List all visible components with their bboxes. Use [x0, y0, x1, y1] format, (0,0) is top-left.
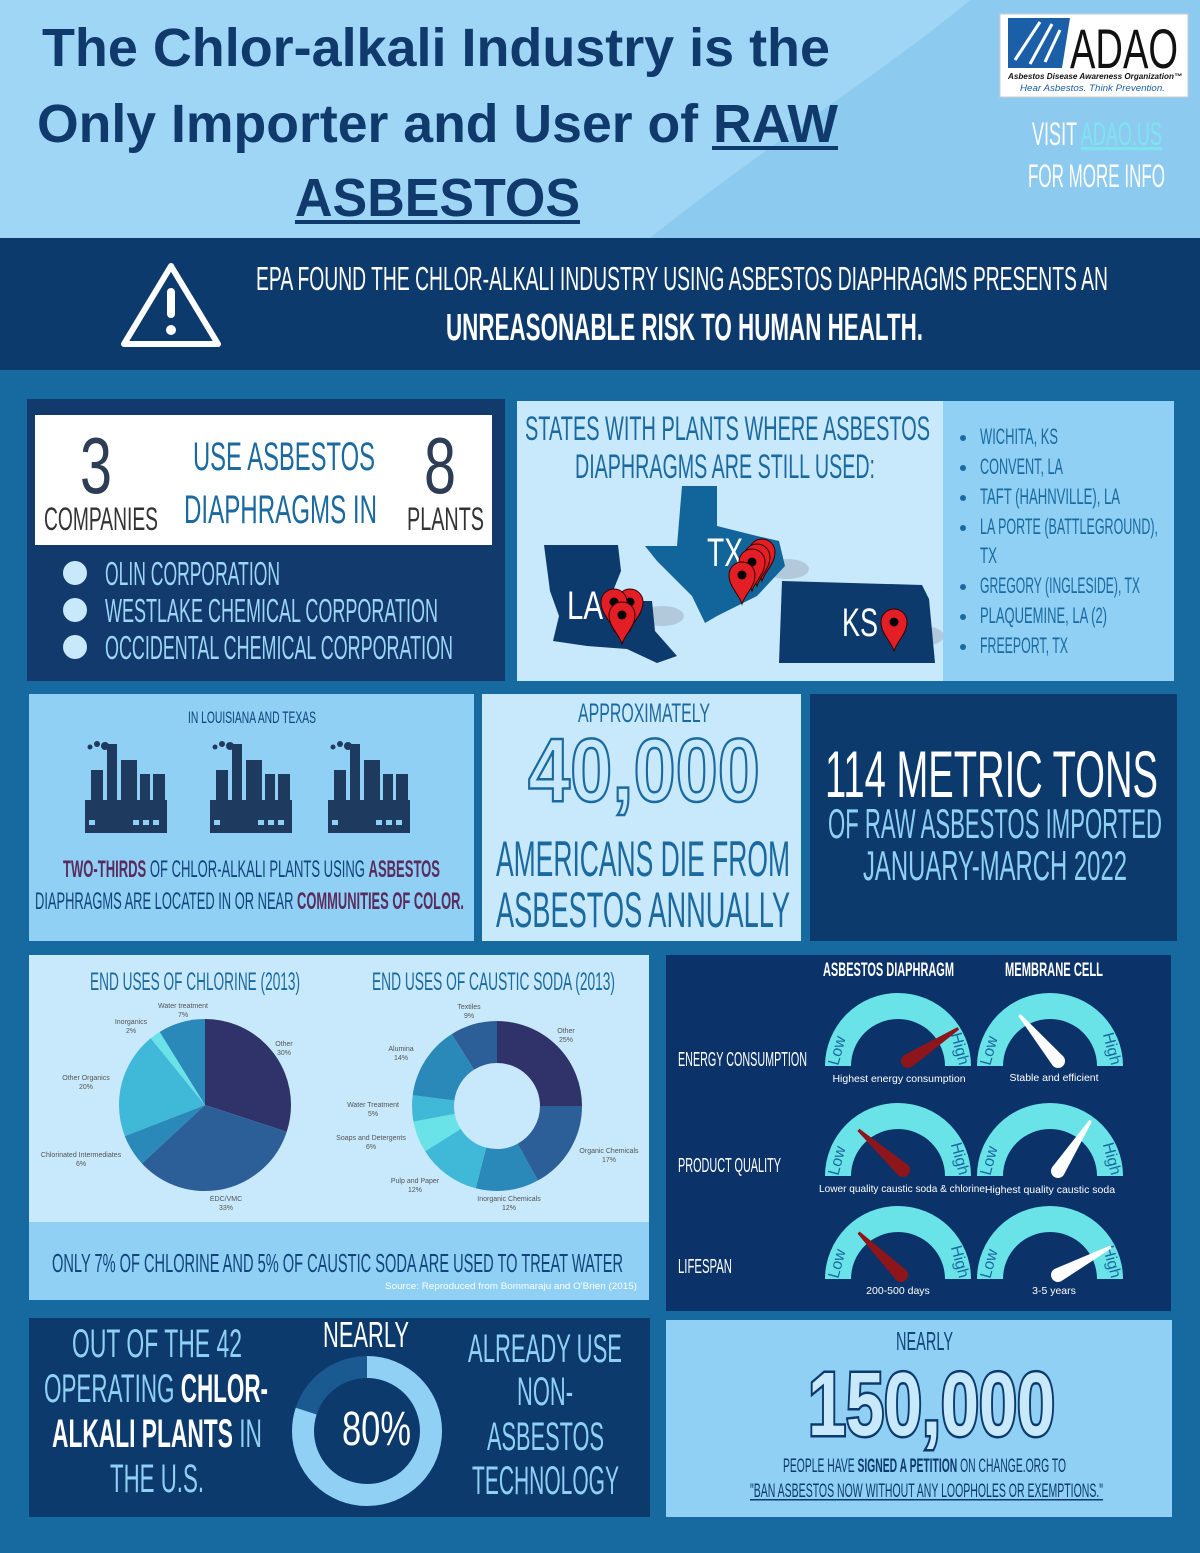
title	[37, 18, 838, 228]
donut chart: caustic soda: 5%	[368, 1111, 378, 1118]
text: DIAPHRAGMS ARE LOCATED IN OR NEAR COMMUNITIES OF COLOR.	[35, 888, 464, 915]
map	[544, 486, 944, 663]
company list	[63, 555, 453, 666]
panel: states map	[517, 401, 944, 681]
stat box: 3	[80, 421, 112, 510]
panel: 40,000 deaths: APPROXIMATELY	[578, 698, 710, 728]
panel: gauges comparison: ENERGY CONSUMPTION	[678, 1049, 807, 1071]
pie chart: chlorine: Inorganics	[115, 1019, 148, 1026]
donut chart: caustic soda: Water Treatment	[347, 1102, 399, 1109]
pie chart: chlorine: Water treatment	[158, 1003, 208, 1010]
donut: 80%	[303, 1367, 431, 1495]
stat box: PLANTS	[407, 501, 484, 537]
panel: 80% non-asbestos: ALKALI PLANTS IN	[52, 1412, 262, 1456]
panel: petition	[666, 1320, 1172, 1517]
logo	[1000, 14, 1188, 97]
panel: 40,000 deaths: 40,000	[528, 721, 760, 821]
panel: gauges comparison: Stable and efficient	[1009, 1072, 1099, 1084]
stat box: DIAPHRAGMS IN	[184, 488, 377, 532]
panel: companies	[27, 399, 505, 681]
logo: Asbestos Disease Awareness Organization™	[1007, 72, 1182, 81]
visit text	[1028, 116, 1165, 194]
icon: warning	[124, 266, 218, 344]
panel: end-use charts: END USES OF CHLORINE (2013)	[90, 968, 300, 996]
panel: gauges comparison: Lower quality caustic soda & chlorine	[819, 1183, 985, 1195]
pie chart: chlorine: 7%	[178, 1012, 188, 1019]
panel: 80% non-asbestos: ALREADY USE	[468, 1327, 622, 1371]
panel: 80% non-asbestos: NEARLY	[323, 1314, 409, 1355]
panel: gauges comparison: Highest energy consumption	[832, 1073, 966, 1085]
pie chart: chlorine: Chlorinated Intermediates	[41, 1152, 122, 1159]
panel: petition: 150,000	[808, 1355, 1055, 1455]
donut chart: caustic soda: Alumina	[388, 1046, 414, 1053]
donut chart: caustic soda: 17%	[602, 1157, 616, 1164]
donut: 80%: 80%	[342, 1403, 411, 1456]
location list: WICHITA, KS	[980, 424, 1058, 449]
map: TX	[707, 531, 743, 575]
title: ASBESTOS	[295, 168, 580, 228]
donut chart: caustic soda: Inorganic Chemicals	[477, 1196, 541, 1203]
panel: 80% non-asbestos: THE U.S.	[110, 1457, 204, 1501]
map heading	[525, 410, 930, 486]
panel: 80% non-asbestos: OUT OF THE 42	[72, 1322, 242, 1366]
pie chart: chlorine: 30%	[277, 1050, 291, 1057]
donut chart: caustic soda: Other	[557, 1028, 575, 1035]
panel: 40,000 deaths: ASBESTOS ANNUALLY	[496, 882, 790, 938]
map: KS	[842, 601, 878, 645]
location list: PLAQUEMINE, LA (2)	[980, 603, 1107, 628]
title: Only Importer and User of RAW	[37, 94, 838, 154]
company list: OCCIDENTAL CHEMICAL CORPORATION	[105, 629, 453, 666]
panel: communities of color	[29, 694, 474, 941]
donut chart: caustic soda: 12%	[408, 1187, 422, 1194]
panel: 114 metric tons	[810, 694, 1177, 941]
text: TWO-THIRDS OF CHLOR-ALKALI PLANTS USING ASBESTOS	[63, 856, 440, 883]
pie chart: chlorine: 6%	[76, 1161, 86, 1168]
location list	[943, 401, 1174, 681]
panel: 40,000 deaths	[482, 694, 801, 941]
donut chart: caustic soda: 12%	[502, 1205, 516, 1212]
panel: gauges comparison: LIFESPAN	[678, 1256, 732, 1278]
text	[35, 856, 464, 915]
panel: gauges comparison: 200-500 days	[866, 1285, 930, 1297]
pie chart: chlorine: EDC/VMC	[210, 1196, 242, 1203]
pie chart: chlorine: 33%	[219, 1205, 233, 1212]
panel: gauges comparison: MEMBRANE CELL	[1005, 960, 1103, 981]
panel: gauges comparison	[666, 955, 1171, 1311]
company list: OLIN CORPORATION	[105, 555, 280, 592]
panel: gauges comparison: Highest quality caustic soda	[985, 1184, 1115, 1196]
donut chart: caustic soda: Soaps and Detergents	[336, 1135, 406, 1142]
location list: TX	[980, 543, 997, 568]
donut chart: caustic soda: Pulp and Paper	[391, 1178, 440, 1185]
pie chart: chlorine: Other	[275, 1041, 293, 1048]
map heading: DIAPHRAGMS ARE STILL USED:	[575, 448, 875, 486]
donut chart: caustic soda: Textiles	[457, 1004, 481, 1011]
icon: factories	[85, 741, 410, 833]
panel: petition: PEOPLE HAVE SIGNED A PETITION ON CHANGE.ORG TO	[783, 1456, 1066, 1477]
title: The Chlor-alkali Industry is the	[42, 18, 830, 78]
panel: 80% non-asbestos	[29, 1314, 650, 1517]
pie chart: chlorine: Other Organics	[62, 1075, 110, 1082]
stat box: 8	[424, 421, 456, 510]
panel: communities of color: IN LOUISIANA AND TEXAS	[188, 708, 316, 727]
donut chart: caustic soda	[336, 1004, 639, 1212]
location list: CONVENT, LA	[980, 454, 1063, 479]
banner text	[256, 260, 1108, 349]
map heading: STATES WITH PLANTS WHERE ASBESTOS	[525, 410, 930, 448]
donut chart: caustic soda: 9%	[464, 1013, 474, 1020]
donut chart: caustic soda: 14%	[394, 1055, 408, 1062]
panel: gauges comparison: 3-5 years	[1032, 1285, 1076, 1297]
location list: FREEPORT, TX	[980, 633, 1068, 658]
panel: gauges comparison: PRODUCT QUALITY	[678, 1155, 781, 1177]
panel: 40,000 deaths: AMERICANS DIE FROM	[496, 831, 790, 887]
panel: 80% non-asbestos: ASBESTOS	[487, 1415, 604, 1459]
company list: WESTLAKE CHEMICAL CORPORATION	[105, 592, 438, 629]
panel: 80% non-asbestos: TECHNOLOGY	[472, 1459, 619, 1503]
chart footer	[29, 1222, 649, 1300]
panel: gauges comparison: ASBESTOS DIAPHRAGM	[823, 960, 954, 981]
donut chart: caustic soda: 6%	[366, 1144, 376, 1151]
donut chart: caustic soda: 25%	[559, 1037, 573, 1044]
pie chart: chlorine	[41, 1003, 293, 1212]
pie chart: chlorine: 2%	[126, 1028, 136, 1035]
map: LA	[567, 584, 603, 628]
stat box: USE ASBESTOS	[193, 435, 375, 479]
panel: end-use charts	[29, 955, 649, 1300]
chart footer: Source: Reproduced from Bommaraju and O'Brien (2015)	[385, 1281, 637, 1291]
chart footer: ONLY 7% OF CHLORINE AND 5% OF CAUSTIC SODA ARE USED TO TREAT WATER	[52, 1248, 623, 1278]
panel: 80% non-asbestos: NON-	[517, 1370, 573, 1414]
panel: 80% non-asbestos: OPERATING CHLOR-	[44, 1367, 268, 1411]
pie chart: chlorine: 20%	[79, 1084, 93, 1091]
stat box	[35, 415, 492, 545]
donut chart: caustic soda: Organic Chemicals	[579, 1148, 639, 1155]
logo: Hear Asbestos. Think Prevention.	[1020, 83, 1165, 93]
banner	[0, 238, 1200, 370]
stat box: COMPANIES	[44, 501, 158, 537]
panel: end-use charts: END USES OF CAUSTIC SODA (2013)	[372, 968, 615, 996]
panel: petition: NEARLY	[896, 1326, 953, 1356]
header background	[0, 0, 1200, 238]
